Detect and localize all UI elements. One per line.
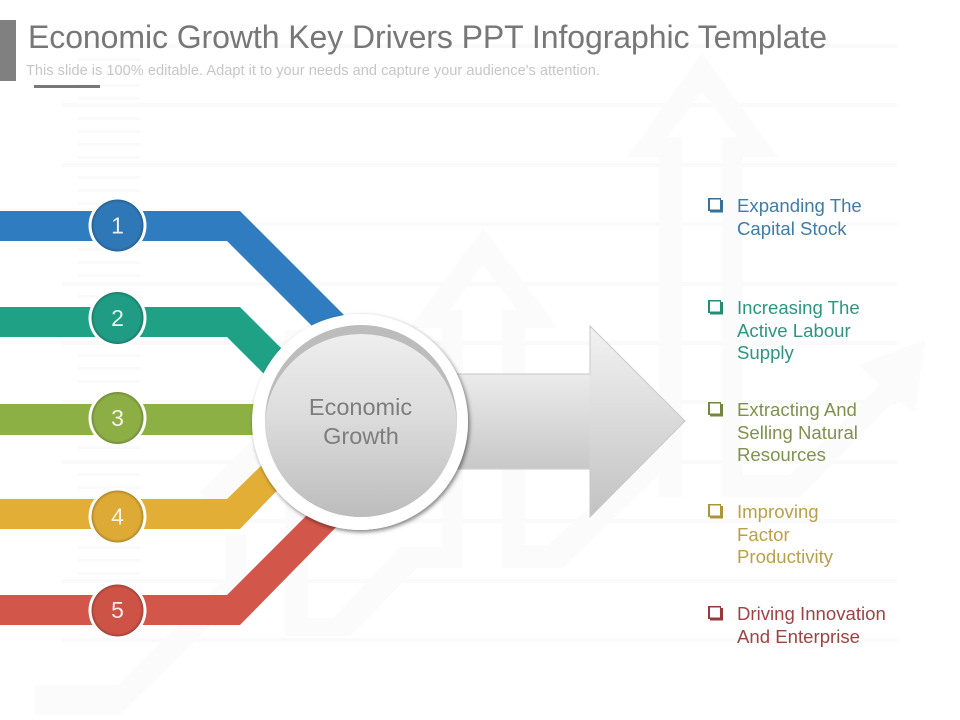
list item 1: Expanding The Capital Stock: Expanding The bbox=[737, 195, 862, 216]
number badge 3: 3 bbox=[111, 405, 124, 431]
band 3 olive bbox=[0, 404, 270, 435]
list item 3: Extracting And Selling Natural Resources: Selling Natural bbox=[737, 422, 858, 443]
grey rim bbox=[265, 325, 457, 517]
checkbox icon bbox=[708, 606, 723, 620]
list item 5: Driving Innovation And Enterprise: And Enterprise bbox=[737, 626, 860, 647]
list item 3: Extracting And Selling Natural Resources: Resources bbox=[737, 444, 826, 465]
rising band with arrow head at right bbox=[722, 340, 925, 497]
lower left rising band bbox=[35, 535, 247, 715]
list item 4: Improving Factor Productivity: Factor bbox=[737, 524, 790, 545]
title: Economic Growth Key Drivers PPT Infographic Template bbox=[28, 19, 827, 55]
list item 4: Improving Factor Productivity: Improving bbox=[737, 501, 819, 522]
list item 5: Driving Innovation And Enterprise bbox=[708, 603, 886, 647]
list item 3: Extracting And Selling Natural Resources: Extracting And bbox=[737, 399, 857, 420]
list item 1: Expanding The Capital Stock bbox=[708, 195, 862, 239]
list item 2: Increasing The Active Labour Supply: Supply bbox=[737, 342, 795, 363]
list item 5: Driving Innovation And Enterprise: Driving Innovation bbox=[737, 603, 886, 624]
number badge 5 bbox=[88, 582, 146, 640]
list item 4: Improving Factor Productivity: Productivity bbox=[737, 546, 834, 567]
number badge 1: 1 bbox=[111, 212, 124, 238]
checkbox icon bbox=[708, 198, 723, 212]
central circle: Economic Growth: Growth bbox=[323, 423, 399, 449]
band 1 blue bbox=[0, 211, 350, 334]
number badge 4: 4 bbox=[111, 504, 124, 530]
center label: Economic bbox=[309, 394, 412, 420]
list item 2: Increasing The Active Labour Supply bbox=[708, 297, 860, 363]
central circle: Economic Growth bbox=[252, 314, 468, 530]
number badge 3 bbox=[88, 389, 146, 447]
checkbox icon bbox=[708, 504, 723, 518]
list item 2: Increasing The Active Labour Supply: Increasing The bbox=[737, 297, 860, 318]
band 2 teal bbox=[0, 307, 290, 380]
title accent block bbox=[0, 20, 16, 81]
list item 4: Improving Factor Productivity bbox=[708, 501, 834, 567]
band 4 yellow bbox=[0, 457, 290, 529]
list item 2: Increasing The Active Labour Supply: Active Labour bbox=[737, 320, 851, 341]
list item 1: Expanding The Capital Stock: Capital Stock bbox=[737, 218, 847, 239]
outlined big up arrow bbox=[627, 53, 778, 497]
number badge 2: 2 bbox=[111, 305, 124, 331]
large right arrow bbox=[455, 326, 685, 517]
gradient disc bbox=[265, 334, 457, 518]
number badge 4 bbox=[88, 488, 146, 546]
subtitle: This slide is 100% editable. Adapt it to your needs and capture your audience's attention. bbox=[26, 63, 600, 79]
white ring bbox=[252, 314, 468, 530]
checkbox icon bbox=[708, 300, 723, 314]
number badge 5: 5 bbox=[111, 597, 124, 623]
colored driver bands bbox=[0, 211, 350, 625]
outlined middle up arrow bbox=[285, 228, 659, 636]
number badge 1 bbox=[88, 196, 146, 254]
title underline bbox=[34, 85, 100, 88]
band 5 red bbox=[0, 507, 345, 625]
number badge 2 bbox=[88, 289, 146, 347]
checkbox icon bbox=[708, 402, 723, 416]
list item 3: Extracting And Selling Natural Resources bbox=[708, 399, 858, 465]
